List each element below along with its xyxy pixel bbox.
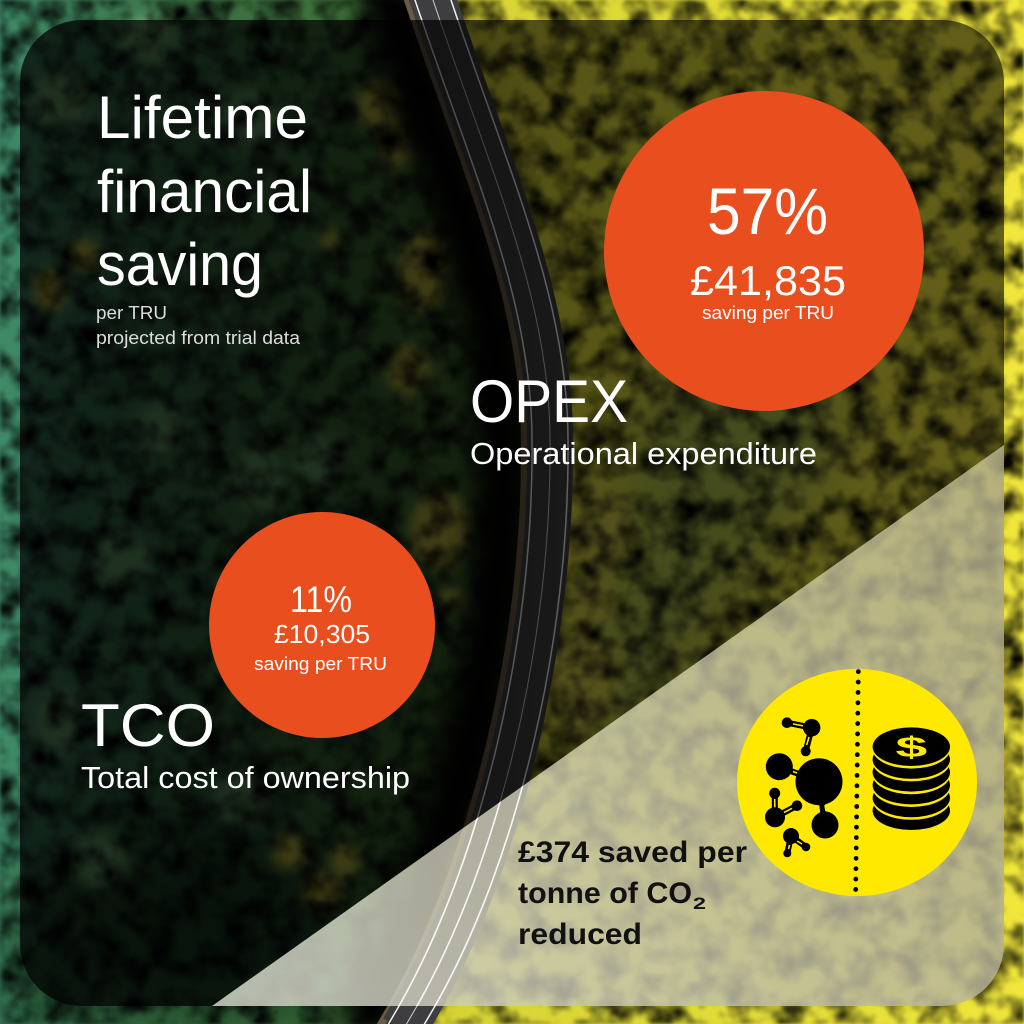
OPEX percentage: 57% bbox=[707, 174, 828, 248]
icon: coin stack bbox=[873, 727, 950, 830]
CO2 saving text: reduced bbox=[518, 918, 642, 951]
subheading: projected from trial data bbox=[96, 327, 301, 348]
TCO label: Total cost of ownership bbox=[81, 760, 410, 795]
subheading: per TRU bbox=[96, 302, 167, 323]
TCO label bbox=[81, 692, 410, 795]
icon: dollar sign: $ bbox=[895, 731, 927, 763]
subheading bbox=[96, 302, 301, 348]
CO2 saving text: tonne of CO bbox=[518, 877, 692, 910]
CO2 saving text: £374 saved per bbox=[518, 836, 747, 869]
TCO percentage: 11% bbox=[290, 579, 352, 620]
heading: Lifetime financial saving bbox=[97, 84, 312, 298]
road lines seen through the light panel bbox=[398, 786, 524, 1006]
TCO saving label: saving per TRU bbox=[254, 653, 387, 674]
OPEX amount: £41,835 bbox=[690, 257, 846, 304]
road bbox=[378, 0, 568, 1024]
CO2 saving text: 2 bbox=[693, 894, 706, 913]
heading: Lifetime financial saving: Lifetime bbox=[97, 84, 308, 151]
OPEX label bbox=[470, 368, 817, 471]
title block bbox=[96, 84, 312, 348]
light triangular panel bbox=[212, 445, 1004, 1006]
heading: Lifetime financial saving: saving bbox=[97, 231, 263, 298]
CO2 saving text bbox=[518, 836, 747, 951]
OPEX saving label: saving per TRU bbox=[702, 302, 834, 323]
callout: OPEX saving circle bbox=[604, 91, 924, 411]
TCO amount: £10,305 bbox=[274, 619, 370, 649]
OPEX label: OPEX bbox=[470, 368, 628, 435]
icon: yellow badge with molecule and coins bbox=[737, 669, 977, 896]
divider dots bbox=[856, 672, 858, 890]
TCO label: TCO bbox=[81, 692, 215, 759]
heading: Lifetime financial saving: financial bbox=[97, 158, 312, 225]
OPEX label: Operational expenditure bbox=[470, 436, 817, 471]
callout: TCO saving circle bbox=[209, 512, 435, 738]
icon: molecule bbox=[765, 717, 842, 857]
